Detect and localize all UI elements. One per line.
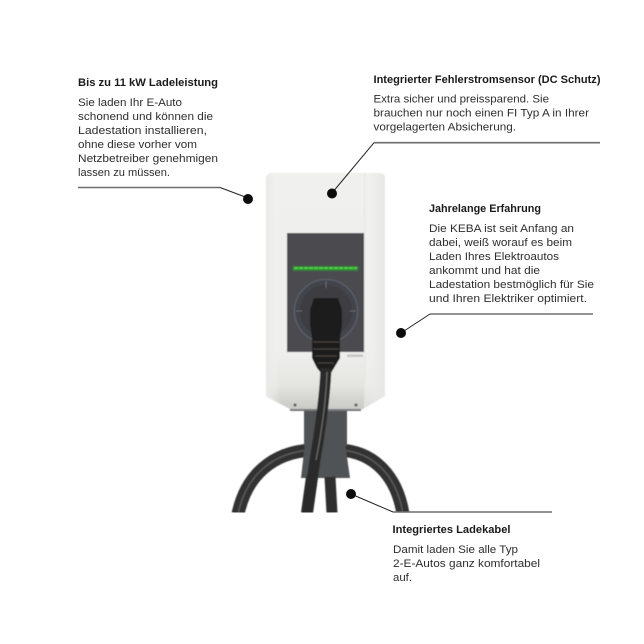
heading: Integrierter Fehlerstromsensor (DC Schutz) [374,74,601,86]
wallbox product photo [238,173,403,514]
front cable [307,368,327,514]
body text [429,223,594,305]
heading: Jahrelange Erfahrung [429,203,541,215]
body text: Netzbetreiber genehmigen [78,153,218,165]
callout: Integrierter Fehlerstromsensor [327,74,601,198]
heading: Bis zu 11 kW Ladeleistung [78,77,218,89]
KEBA mini logo [347,354,363,357]
body text: Laden Ihres Elektroautos [429,251,560,263]
callout: Bis zu 11 kW Ladeleistung [78,77,253,204]
body text: lassen zu müssen. [78,167,170,179]
housing [266,173,385,409]
body text: Extra sicher und preissparend. Sie [374,94,549,106]
body text [374,94,589,134]
plug [310,298,342,373]
body text: schonend und können die [78,111,213,123]
wall mount bracket [290,406,361,478]
body text: ohne diese vorher vom [78,139,197,151]
body text: Damit laden Sie alle Typ [393,544,518,556]
body text: auf. [393,572,412,584]
body text: 2-E-Autos ganz komfortabel [393,558,540,570]
callout: Integriertes Ladekabel [346,489,552,584]
body text [78,97,218,179]
body text: dabei, weiß worauf es beim [429,237,572,249]
body text: vorgelagerten Absicherung. [374,122,516,134]
leader line [346,489,552,512]
body text: Ladestation installieren, [78,125,207,137]
body text: und Ihren Elektriker optimiert. [429,293,587,305]
body text: Die KEBA ist seit Anfang an [429,223,574,235]
green LED bar [293,266,358,270]
body text: Ladestation bestmöglich für Sie [429,279,594,291]
dark front panel [287,233,364,352]
body text: brauchen nur noch einen FI Typ A in Ihrer [374,108,589,120]
heading: Integriertes Ladekabel [392,524,510,536]
leader line [396,314,593,338]
body text [393,544,540,584]
lower cable strands [307,477,332,513]
body text: ankommt und hat die [429,265,540,277]
body text: Sie laden Ihr E-Auto [78,97,182,109]
leader line [78,188,253,204]
socket ring [294,280,358,342]
leader line [327,143,600,198]
callout: Jahrelange Erfahrung [396,203,594,338]
charging cable loops [238,450,403,514]
